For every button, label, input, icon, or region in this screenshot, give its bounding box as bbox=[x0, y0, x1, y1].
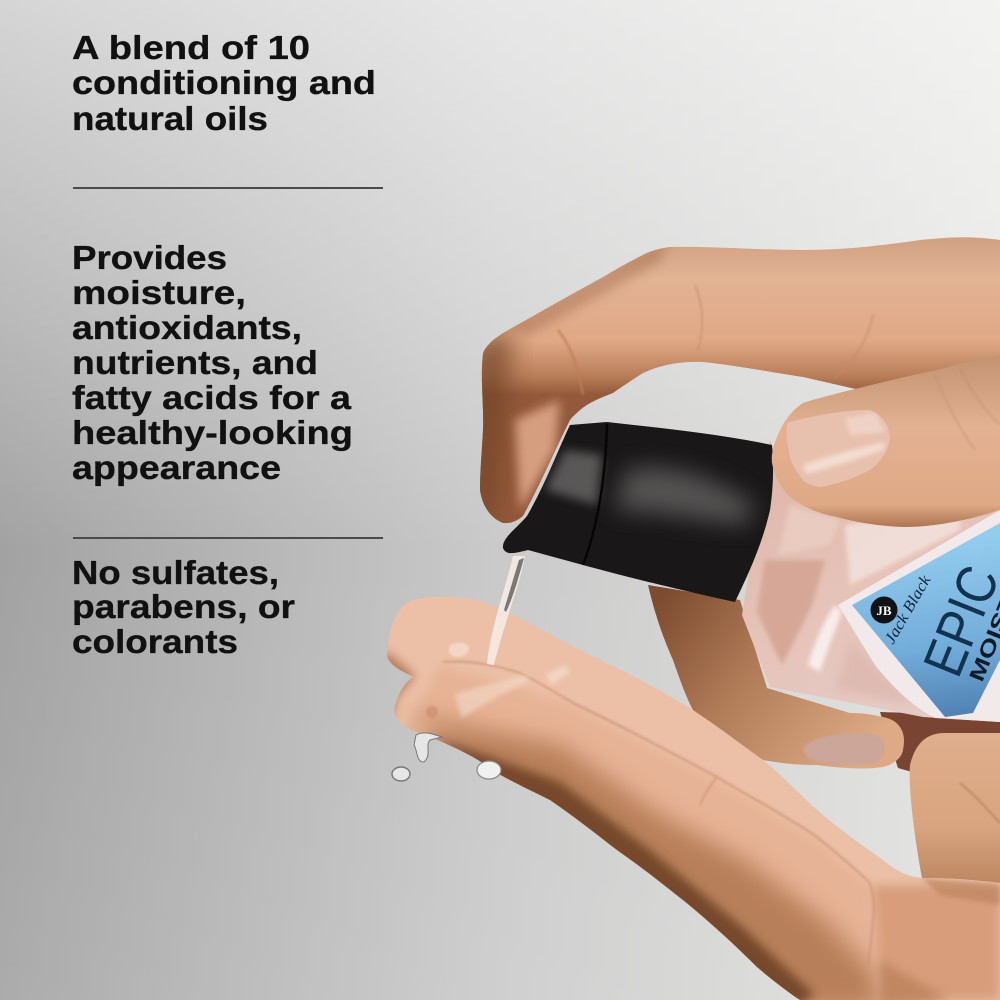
divider 1 bbox=[73, 187, 383, 189]
heading: benefits: moisture, bbox=[72, 275, 246, 312]
heading: free from: colorants bbox=[72, 624, 238, 661]
cap sheen bbox=[615, 467, 755, 525]
gap shadow bbox=[880, 712, 1000, 772]
hand: fingers behind the bottle bbox=[648, 585, 1000, 883]
text column bbox=[72, 30, 383, 661]
joint crease bbox=[700, 777, 717, 805]
thumb wrinkles bbox=[935, 368, 1000, 450]
lower finger tan shading bbox=[410, 715, 885, 1000]
palm tone bbox=[873, 885, 1000, 1000]
oil on fingers bbox=[449, 643, 469, 657]
nail highlight bbox=[803, 442, 885, 474]
hand: index finger bbox=[470, 237, 1000, 523]
fingertip light bbox=[515, 400, 560, 510]
hand: palm and lower fingers bbox=[370, 597, 1000, 1000]
middle finger nail bbox=[803, 733, 885, 764]
heading: benefits: Provides bbox=[72, 240, 227, 277]
heading: benefits: fatty acids for a bbox=[72, 380, 351, 417]
oil stream and drops bbox=[392, 556, 570, 781]
divider 2 bbox=[73, 537, 383, 539]
bottle body bbox=[742, 440, 1000, 722]
drops bbox=[414, 733, 442, 762]
heading: free from: No sulfates, bbox=[72, 555, 279, 592]
finger crease bbox=[443, 662, 874, 965]
pump cap bbox=[503, 422, 773, 602]
heading: blend of oils bbox=[72, 30, 376, 138]
hand and product photo illustration bbox=[370, 237, 1000, 1000]
heading: benefits: healthy-looking bbox=[72, 415, 353, 452]
heading: blend of oils: A blend of 10 bbox=[72, 30, 310, 67]
label bbox=[838, 510, 1000, 722]
bottle bbox=[742, 440, 1000, 722]
thumb nail bbox=[787, 410, 890, 487]
middle finger bbox=[648, 585, 904, 768]
hand: thumb bbox=[772, 355, 1000, 527]
joint creases bbox=[558, 330, 583, 395]
fingertip shading bbox=[387, 648, 418, 718]
label logo: JB bbox=[876, 603, 892, 618]
heading: free from bbox=[72, 555, 295, 661]
heading: blend of oils: natural oils bbox=[72, 101, 268, 138]
knuckle shadow bbox=[470, 330, 515, 520]
heading: benefits bbox=[72, 240, 353, 487]
label logo bbox=[870, 596, 898, 624]
label signature: Jack Black bbox=[882, 572, 935, 647]
heading: benefits: nutrients, and bbox=[72, 345, 318, 382]
heading: blend of oils: conditioning and bbox=[72, 65, 376, 102]
ring finger bbox=[910, 733, 1000, 883]
heading: benefits: appearance bbox=[72, 450, 281, 487]
heading: benefits: antioxidants, bbox=[72, 310, 302, 347]
lower finger dark edge bbox=[430, 735, 815, 1000]
lower finger body tone bbox=[400, 665, 880, 1000]
heading: free from: parabens, or bbox=[72, 589, 295, 626]
